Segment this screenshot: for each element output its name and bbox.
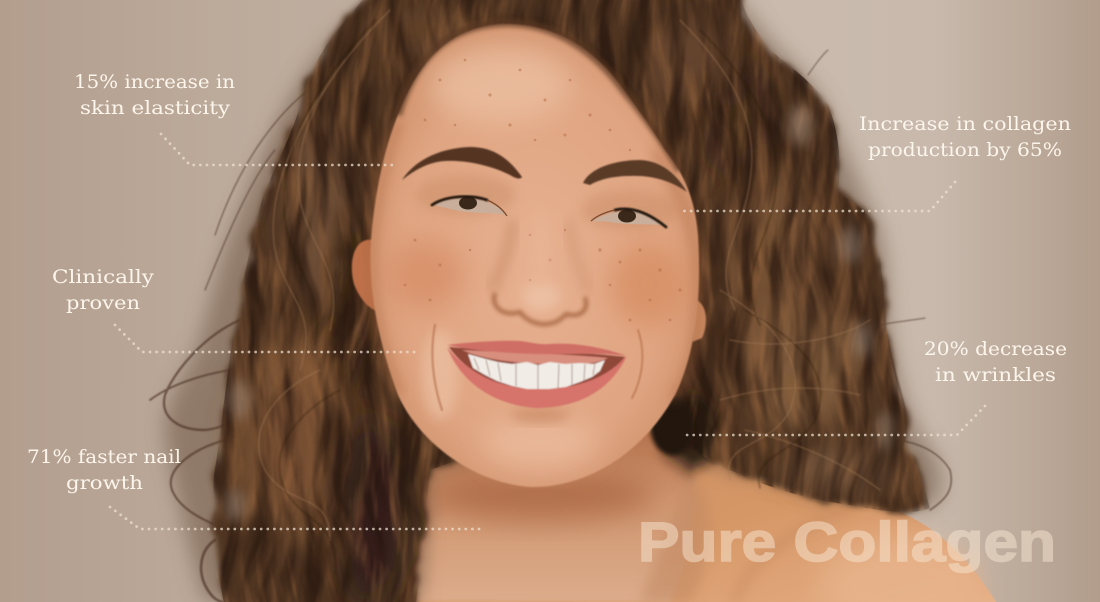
nose (492, 210, 588, 324)
callout: collagen production: Increase in collagen (859, 114, 1071, 135)
eyebrow right (583, 160, 687, 192)
callout: nail growth: 71% faster nail (27, 447, 181, 468)
callout: clinically proven: proven (66, 293, 140, 314)
freckles (404, 59, 682, 321)
face (370, 24, 699, 487)
hair curls outside the silhouette (150, 50, 951, 602)
forehead hair shadow (398, 23, 680, 170)
hair strands (259, 10, 880, 575)
smile creases (432, 325, 642, 410)
hair behind the jaw (650, 395, 694, 455)
hair highlights (235, 5, 900, 602)
callout: skin elasticity: skin elasticity (80, 98, 231, 119)
hair shape for texture (213, 0, 930, 602)
portrait photo (150, 0, 996, 602)
callout: nail growth (27, 447, 480, 529)
hair mass (213, 0, 930, 602)
tooth gaps (474, 358, 595, 389)
mouth (447, 341, 627, 408)
hair see-through gaps (225, 105, 893, 521)
lower lip (447, 347, 627, 408)
callout: wrinkles (686, 339, 1067, 435)
eye left (432, 196, 507, 216)
callout: skin elasticity: 15% increase in (74, 72, 235, 93)
callout: wrinkles: in wrinkles (935, 365, 1056, 386)
callout: clinically proven (52, 267, 415, 352)
ear right (692, 300, 706, 342)
hair texture light (213, 0, 930, 602)
brand wordmark: Pure Collagen (638, 510, 1056, 573)
upper lip (447, 341, 627, 356)
callout: skin elasticity (74, 72, 392, 165)
eyebrow left (402, 147, 522, 180)
callout: collagen production: production by 65% (868, 140, 1062, 161)
mouth interior (449, 347, 625, 389)
hair texture dark (213, 0, 930, 602)
callout: wrinkles: 20% decrease (924, 339, 1067, 360)
teeth (468, 354, 605, 389)
ear (352, 240, 380, 312)
neck (408, 430, 711, 602)
shoulder and chest (400, 420, 996, 602)
wispy hair halo (165, 0, 943, 602)
eye right (591, 209, 666, 227)
callout: collagen production (682, 114, 1071, 211)
callout: clinically proven: Clinically (52, 267, 155, 288)
gums (462, 350, 608, 365)
callout: nail growth: growth (66, 473, 143, 494)
